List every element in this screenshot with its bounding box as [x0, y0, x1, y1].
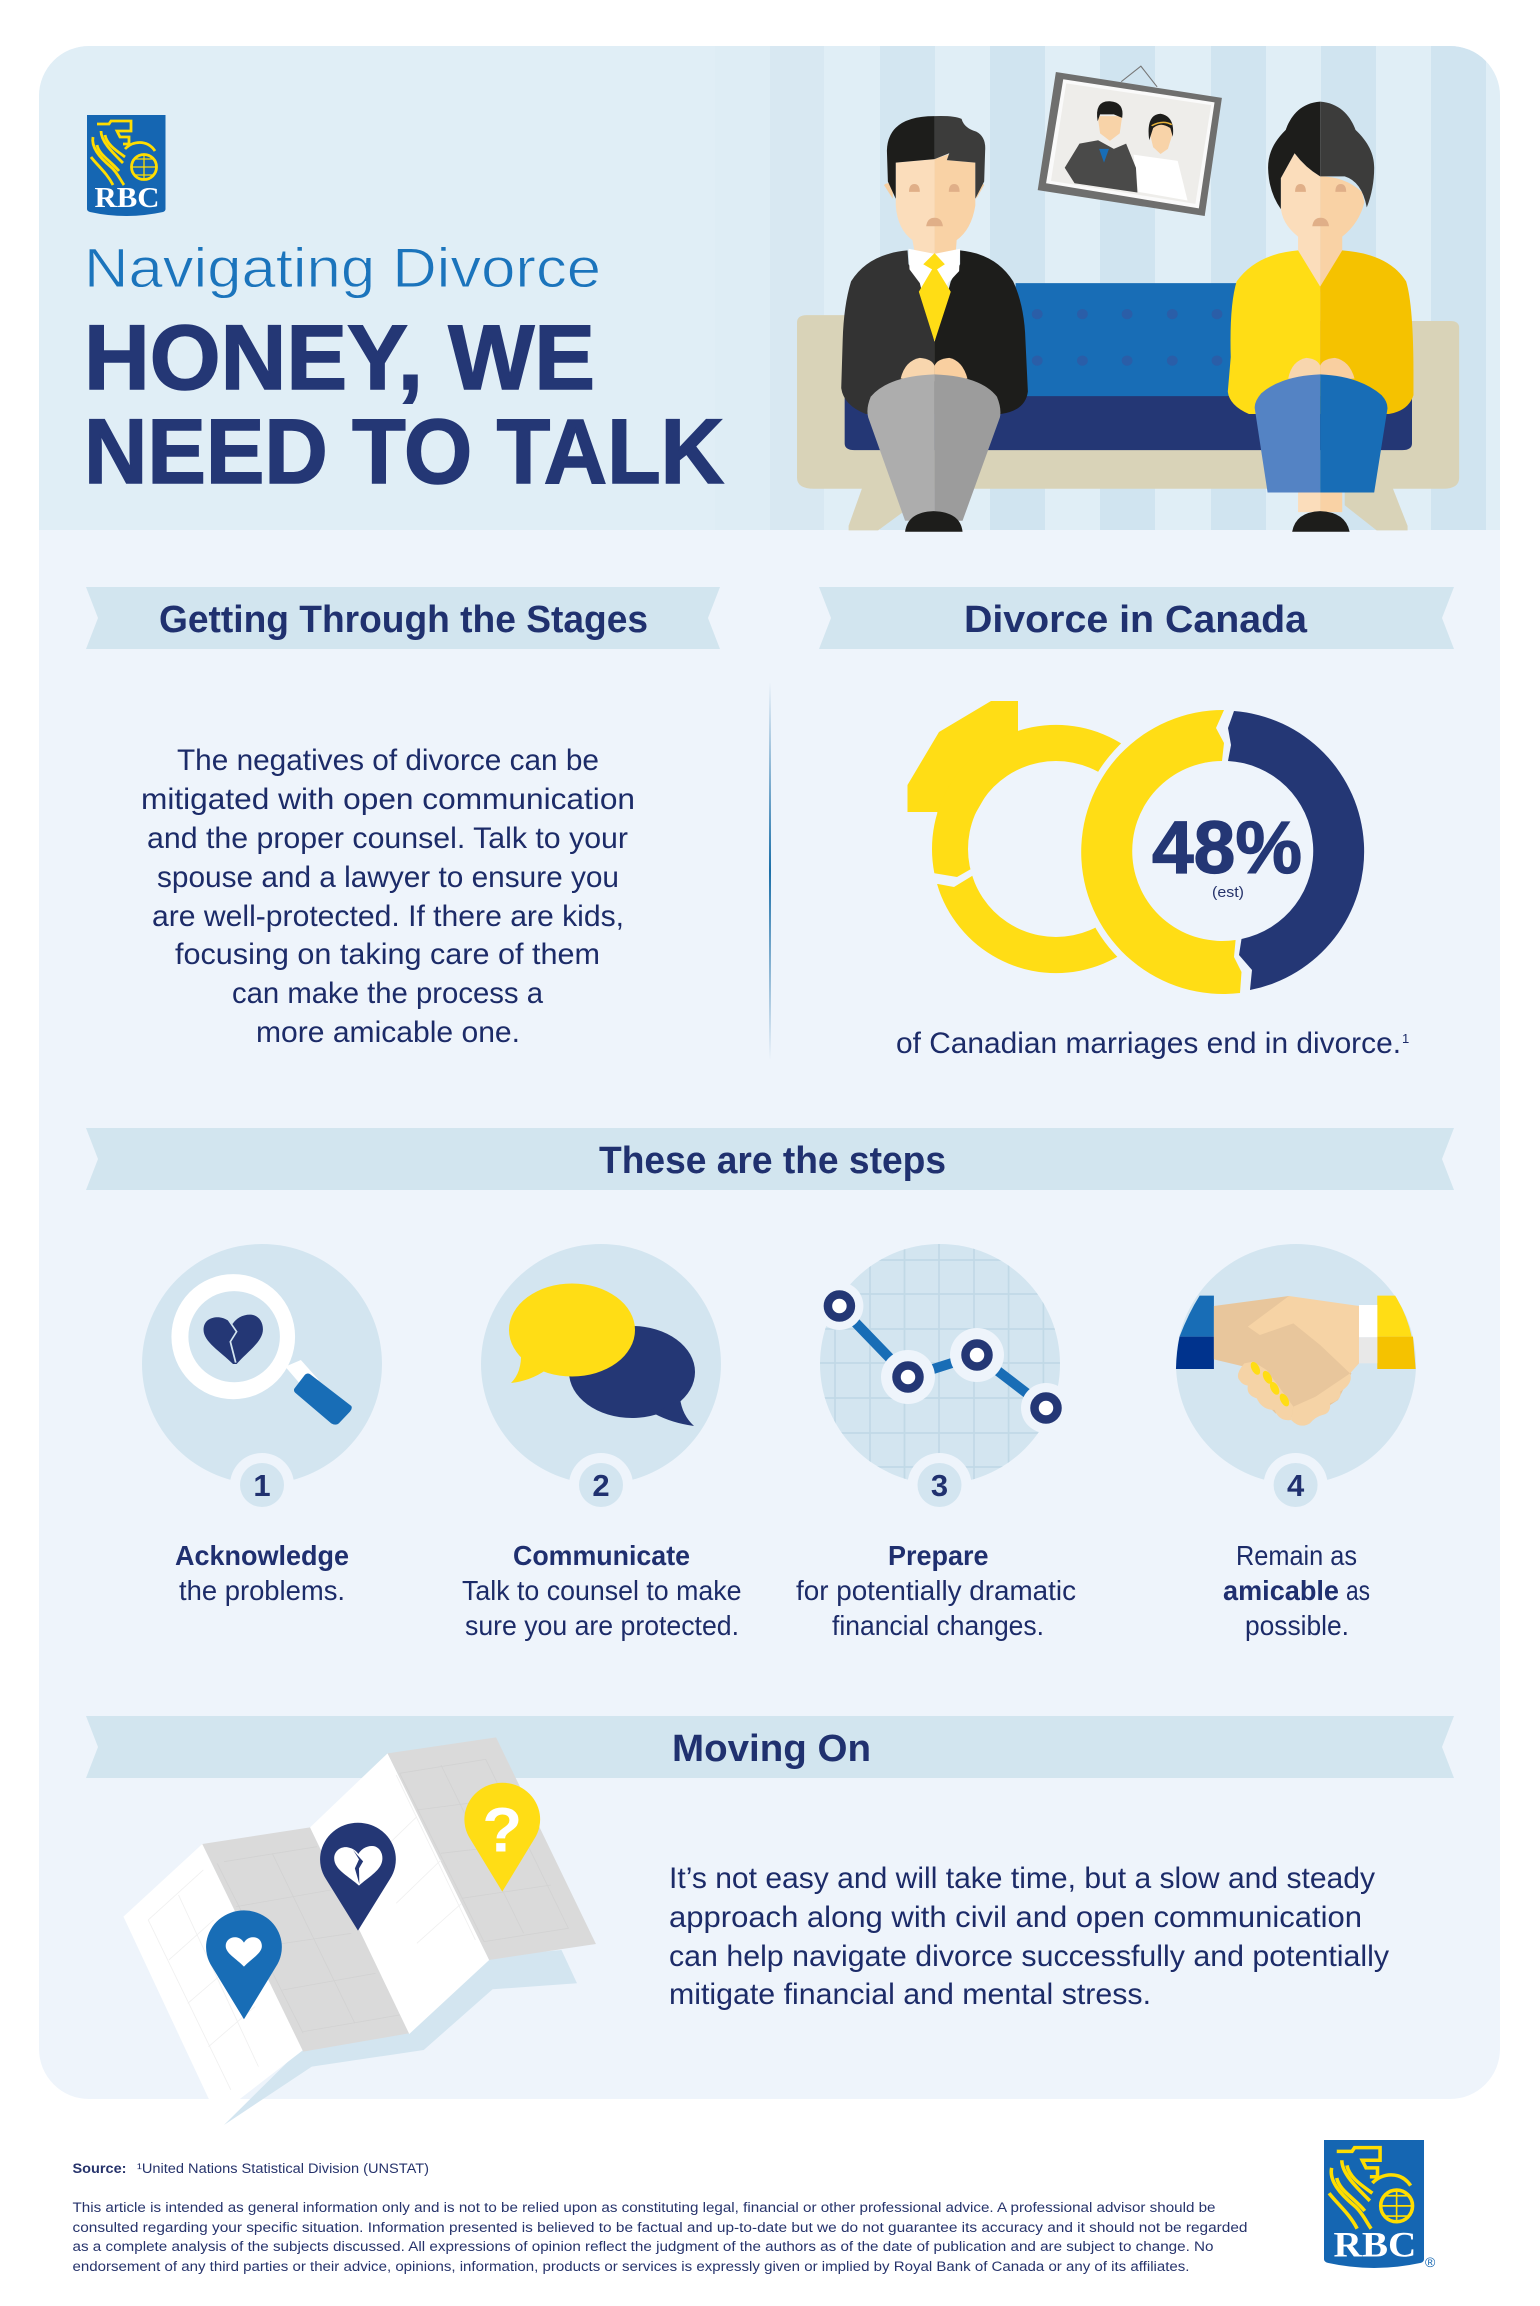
step text: financial changes. — [832, 1610, 1044, 1641]
step text: amicable — [1223, 1575, 1339, 1606]
footer: legal disclaimer: as a complete analysis of the subjects discussed. All expressions of opinion reflect the judgment of the authors as of the date of publication and are subject to change. No — [72, 2239, 1214, 2254]
text block: stages description: mitigated with open communication — [141, 783, 635, 816]
percent value: 48% — [1152, 806, 1302, 889]
text block: moving on description: can help navigate divorce successfully and potentially — [669, 1940, 1389, 1973]
logo: RBC shield in footer: RBC — [1334, 2225, 1416, 2265]
number badge — [918, 1463, 962, 1507]
banner: These are the steps — [86, 1128, 1454, 1190]
step text: Acknowledge — [175, 1540, 349, 1571]
panel: header band with striped wallpaper — [39, 46, 1500, 530]
banner: Getting Through the Stages: Getting Through the Stages — [159, 599, 648, 641]
text block: stages description: can make the process a — [232, 977, 543, 1010]
footer: source line: Source: — [72, 2161, 126, 2176]
step text: Prepare — [888, 1540, 988, 1571]
registered mark: ® — [1425, 2254, 1436, 2270]
sofa — [797, 283, 1459, 530]
title: Honey, we need to talk: NEED TO TALK — [84, 401, 724, 503]
banner: Moving On — [86, 1716, 1454, 1778]
text block: stages description: and the proper counsel. Talk to your — [147, 822, 628, 855]
step text — [1223, 1540, 1370, 1641]
caption: of Canadian marriages end in divorce: of Canadian marriages end in divorce. — [896, 1027, 1401, 1060]
text block: moving on description: mitigate financial and mental stress. — [669, 1978, 1151, 2011]
title: Navigating Divorce: Navigating Divorce — [84, 236, 601, 299]
logo: RBC shield in header: RBC — [94, 183, 160, 214]
pin: blue heart — [206, 1910, 282, 2019]
number badge — [1274, 1463, 1318, 1507]
number badge — [240, 1463, 284, 1507]
step 3: prepare: 3 — [931, 1468, 948, 1503]
pin: navy broken heart — [320, 1823, 396, 1931]
title: Honey, we need to talk — [84, 307, 724, 503]
digit one ring — [908, 701, 1180, 973]
step 2: communicate — [462, 1244, 742, 1641]
icon: magnifying glass with broken heart — [171, 1274, 352, 1425]
title: Honey, we need to talk: HONEY, WE — [84, 307, 595, 409]
caption: of Canadian marriages end in divorce: 1 — [1402, 1031, 1409, 1046]
woman — [1228, 102, 1413, 532]
illustration: folded map with pins — [123, 1737, 596, 2125]
footer: source line: ¹United Nations Statistical Division (UNSTAT) — [137, 2161, 429, 2176]
text block: stages description: are well-protected. If there are kids, — [152, 900, 624, 933]
icon: line chart on grid — [820, 1244, 1062, 1480]
footer: legal disclaimer: consulted regarding your specific situation. Information presented is believed to be factual and up-to-date but we do not guarantee its accuracy and it should not be regarded — [72, 2220, 1248, 2235]
banner: Getting Through the Stages — [86, 587, 720, 649]
illustration: couple on a sofa — [797, 66, 1459, 532]
footer: legal disclaimer: endorsement of any third parties or their advice, opinions, information, products or services is expressly given or implied by Royal Bank of Canada or any of its affiliates. — [72, 2259, 1190, 2274]
text block: stages description — [141, 744, 635, 1049]
step text: possible. — [1245, 1610, 1349, 1641]
pin: yellow question mark: ? — [482, 1795, 522, 1865]
logo: RBC shield in footer — [1324, 2140, 1424, 2268]
footer: legal disclaimer: This article is intended as general information only and is not to be relied upon as constituting legal, financial or other professional advice. A professional advisor should be — [72, 2200, 1216, 2215]
man — [841, 116, 1028, 532]
text block: moving on description — [669, 1862, 1389, 2011]
step 4: remain amicable — [1176, 1244, 1416, 1641]
step text: as — [1346, 1575, 1370, 1606]
text block: moving on description: It’s not easy and will take time, but a slow and steady — [669, 1862, 1375, 1895]
text block: stages description: more amicable one. — [256, 1016, 520, 1049]
logo: RBC shield in header — [87, 115, 166, 216]
step text: the problems. — [179, 1575, 345, 1606]
number badge — [579, 1463, 623, 1507]
step 1: acknowledge: 1 — [253, 1468, 271, 1503]
text block: stages description: spouse and a lawyer to ensure you — [157, 861, 619, 894]
banner: These are the steps: These are the steps — [599, 1140, 946, 1182]
footer: legal disclaimer — [72, 2200, 1248, 2274]
step text — [462, 1540, 742, 1641]
step text: Communicate — [513, 1540, 690, 1571]
text block: stages description: focusing on taking care of them — [175, 938, 600, 971]
step 4: remain amicable: 4 — [1287, 1468, 1305, 1503]
step 1: acknowledge — [142, 1244, 382, 1606]
estimate note: (est) — [1212, 884, 1244, 901]
step text: Remain as — [1236, 1540, 1357, 1571]
step 2: communicate: 2 — [592, 1468, 610, 1503]
step text — [175, 1540, 349, 1606]
text block: moving on description: approach along with civil and open communication — [669, 1901, 1362, 1934]
step text: for potentially dramatic — [796, 1575, 1076, 1606]
step text: sure you are protected. — [465, 1610, 739, 1641]
banner: Moving On: Moving On — [672, 1728, 871, 1770]
banner: Divorce in Canada: Divorce in Canada — [964, 599, 1308, 641]
banner: Divorce in Canada — [819, 587, 1454, 649]
chart: 48 percent donut forming a 100 — [908, 701, 1377, 1003]
icon: speech bubbles — [509, 1284, 695, 1426]
step text: Talk to counsel to make — [462, 1575, 742, 1606]
step text — [796, 1540, 1076, 1641]
picture frame — [1038, 66, 1222, 216]
pin: yellow question mark — [464, 1783, 540, 1892]
text block: stages description: The negatives of divorce can be — [177, 744, 599, 777]
icon: handshake — [1176, 1296, 1416, 1426]
step 3: prepare — [796, 1240, 1076, 1641]
